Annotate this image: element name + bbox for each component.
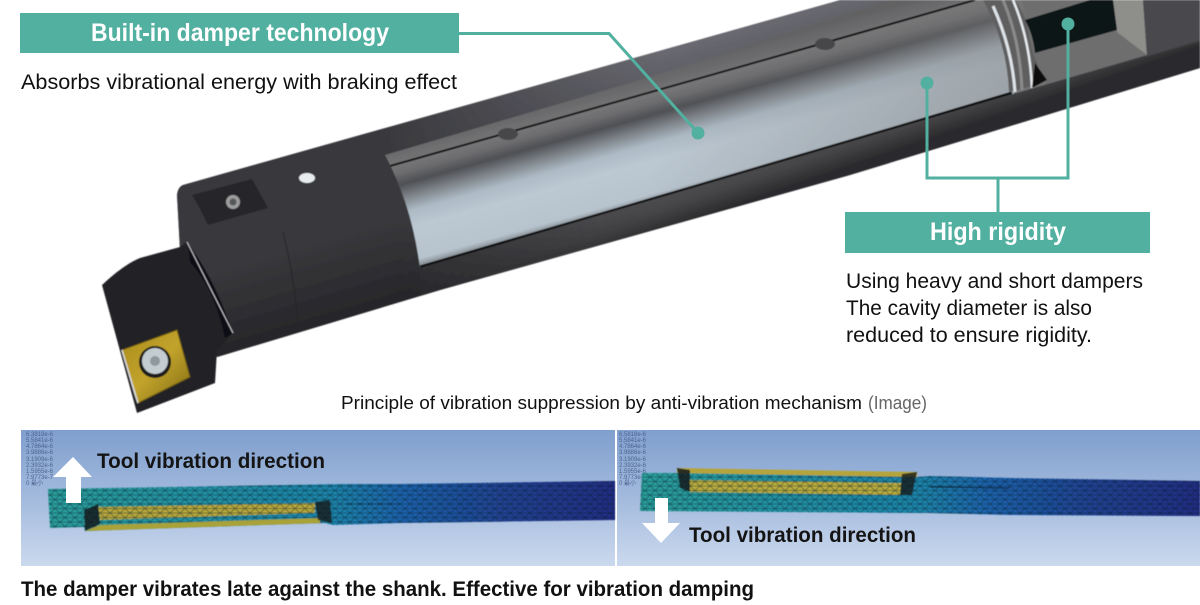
text: damper description: Absorbs vibrational energy with braking effect <box>21 71 457 94</box>
black shaft <box>1025 0 1117 53</box>
connector: rigidity callout <box>920 18 1074 212</box>
damper lower yellow <box>85 518 325 531</box>
upper strip of cavity <box>384 0 1048 268</box>
panel background <box>21 430 615 566</box>
legend scale: 2.3932e-6 <box>619 463 647 469</box>
panel: simulation, tool vibrating upward <box>21 430 615 566</box>
damper upper yellow <box>677 468 917 477</box>
upper groove line <box>390 0 975 166</box>
head recess <box>188 243 233 338</box>
text: rigidity description: The cavity diameter is also <box>846 297 1092 320</box>
legend scale: 7.9773e-7 <box>619 475 647 481</box>
caption: principle of vibration suppression: (Image) <box>868 393 927 413</box>
insert screw <box>139 346 171 378</box>
heading: built-in damper technology: Built-in damper technology <box>91 19 389 47</box>
damper mid yellow <box>688 480 902 495</box>
label: tool vibration direction: Tool vibration direction <box>689 524 916 547</box>
legend scale: 3.1909e-6 <box>26 457 54 463</box>
clamp screw <box>226 195 240 209</box>
front body underside <box>210 230 547 357</box>
end rings of damper <box>983 0 1040 92</box>
legend scale: 7.9773e-7 <box>26 475 54 481</box>
legend scale: 5.5841e-6 <box>26 438 54 444</box>
damper black ends <box>84 504 100 531</box>
heading: built-in damper technology <box>20 13 459 53</box>
clamp pad <box>192 179 268 225</box>
coolant port <box>299 173 315 183</box>
legend scale: 3.9886e-6 <box>26 450 54 456</box>
label: tool vibration direction: Tool vibration direction <box>97 450 325 473</box>
tool holder illustration <box>102 0 1200 413</box>
text: rigidity description: reduced to ensure rigidity. <box>846 324 1092 347</box>
legend scale: 1.5955e-6 <box>26 469 54 475</box>
legend scale: 0 最小 <box>619 479 636 487</box>
right body end <box>1143 0 1200 56</box>
legend scale: 2.3932e-6 <box>26 463 54 469</box>
lit pocket wall <box>1113 0 1147 55</box>
black gap beside ring <box>1032 63 1047 88</box>
silver damper cylinder <box>392 0 1014 268</box>
text: rigidity description <box>846 270 1143 347</box>
carbide insert <box>122 330 190 403</box>
legend scale <box>619 432 647 487</box>
legend scale: 4.7864e-6 <box>619 444 647 450</box>
conclusion text: The damper vibrates late against the shank. Effective for vibration damping <box>21 578 754 601</box>
tool body shank <box>177 0 1200 357</box>
damper black ends <box>677 468 690 492</box>
legend scale: 3.9886e-6 <box>619 450 647 456</box>
panel background <box>617 430 1200 566</box>
legend scale <box>26 432 54 487</box>
heading: high rigidity <box>845 212 1150 253</box>
head block <box>102 242 233 413</box>
legend scale: 6.3818e-6 <box>26 432 54 438</box>
seam on body <box>283 232 298 327</box>
legend scale: 5.5841e-6 <box>619 438 647 444</box>
legend scale: 6.5818e-6 <box>619 432 647 438</box>
window holes <box>498 128 518 140</box>
legend scale: 3.1909e-6 <box>619 457 647 463</box>
damper upper yellow <box>98 503 315 520</box>
lower body strip <box>420 42 1200 296</box>
connector: damper callout <box>459 34 704 140</box>
text: rigidity description: Using heavy and short dampers <box>846 270 1143 293</box>
front body shading <box>177 0 1200 357</box>
insert edge <box>122 350 138 403</box>
mesh model <box>640 468 1200 516</box>
pocket interior <box>1028 26 1107 79</box>
white slit <box>187 242 233 333</box>
arrow: vibration up <box>53 457 92 503</box>
caption: principle of vibration suppression: Principle of vibration suppression by anti-vibration mechanism <box>341 393 862 413</box>
arrow: vibration down <box>642 498 680 543</box>
lower groove line <box>420 93 1012 267</box>
legend scale: 4.7864e-6 <box>26 444 54 450</box>
mesh model <box>48 481 615 531</box>
legend scale: 0 最小 <box>26 479 43 487</box>
heading: high rigidity: High rigidity <box>930 218 1066 246</box>
legend scale: 1.5955e-6 <box>619 469 647 475</box>
cut-away window with damper <box>384 0 1148 268</box>
panel: simulation, tool vibrating downward <box>617 430 1200 566</box>
